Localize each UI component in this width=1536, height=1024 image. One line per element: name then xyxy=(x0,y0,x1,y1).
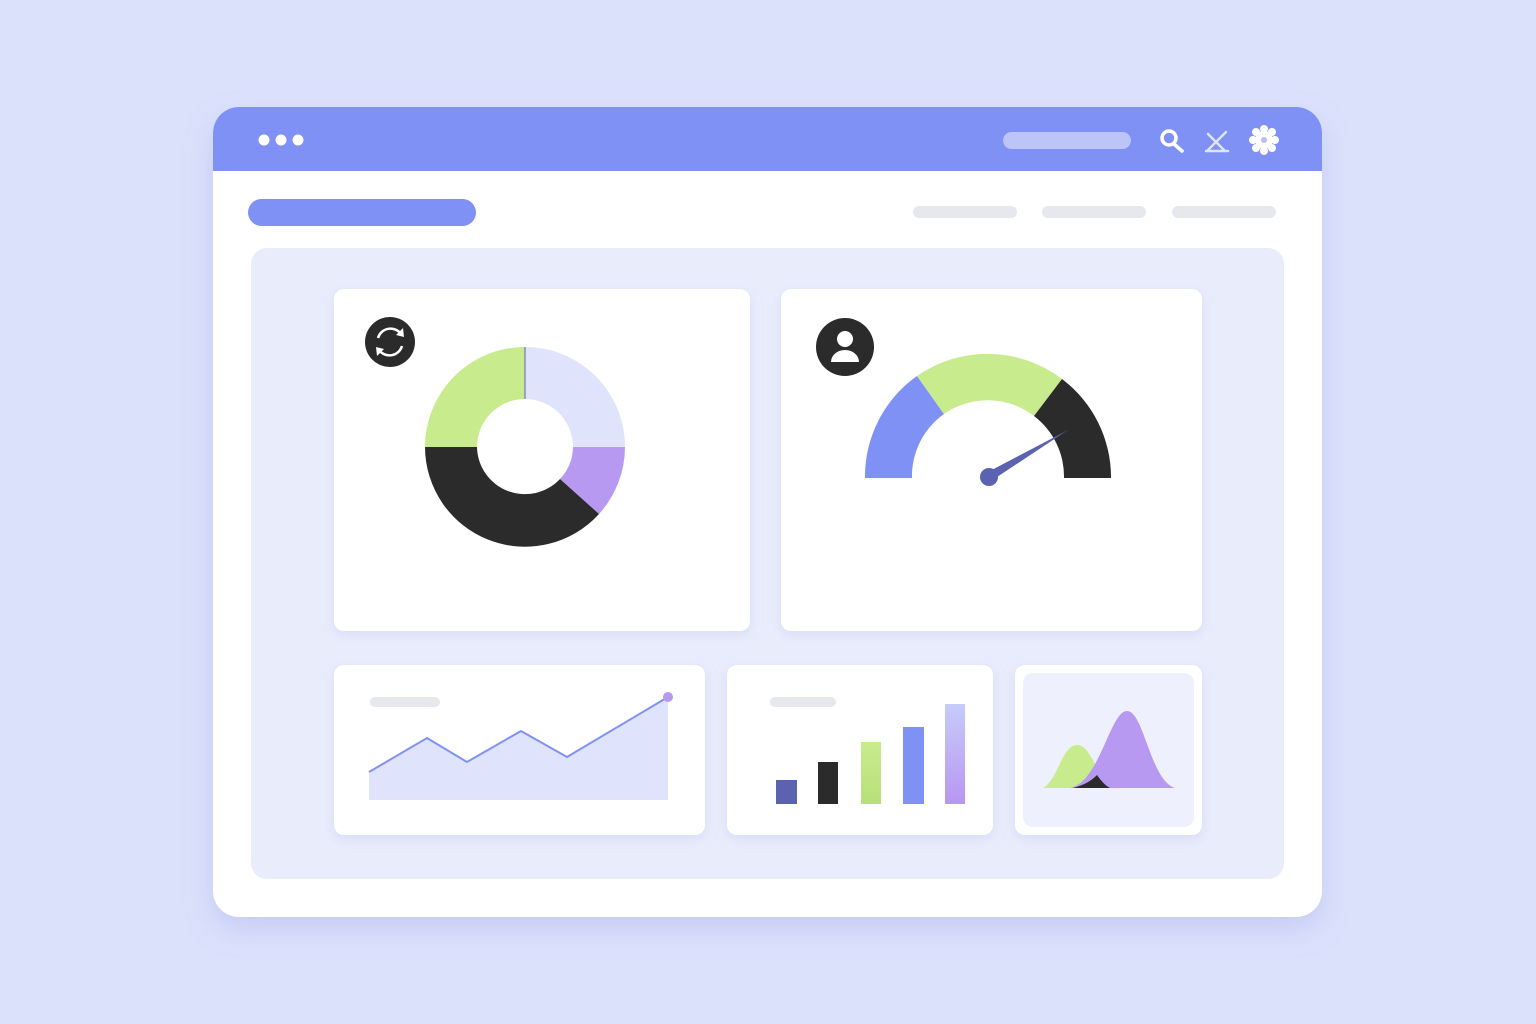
icon: window dots xyxy=(258,134,304,146)
search bar xyxy=(1003,132,1131,149)
icon: user xyxy=(816,318,874,376)
page title bar xyxy=(248,199,476,226)
icon: tools xyxy=(1206,132,1228,151)
icon: search xyxy=(1162,131,1182,151)
donut xyxy=(425,347,625,547)
panel: bar chart xyxy=(727,665,993,835)
gauge needle xyxy=(980,430,1068,486)
nav tabs xyxy=(913,206,1276,218)
window title bar xyxy=(213,107,1322,171)
icon: settings gear xyxy=(1249,125,1279,155)
panel: donut chart xyxy=(334,289,750,631)
browser window xyxy=(213,107,1322,917)
gauge arcs xyxy=(865,354,1111,478)
dashboard area xyxy=(251,248,1284,879)
panel: line chart xyxy=(334,665,705,835)
panel: distribution curves xyxy=(1015,665,1202,835)
icon: refresh xyxy=(365,317,415,367)
panel: gauge xyxy=(781,289,1202,631)
